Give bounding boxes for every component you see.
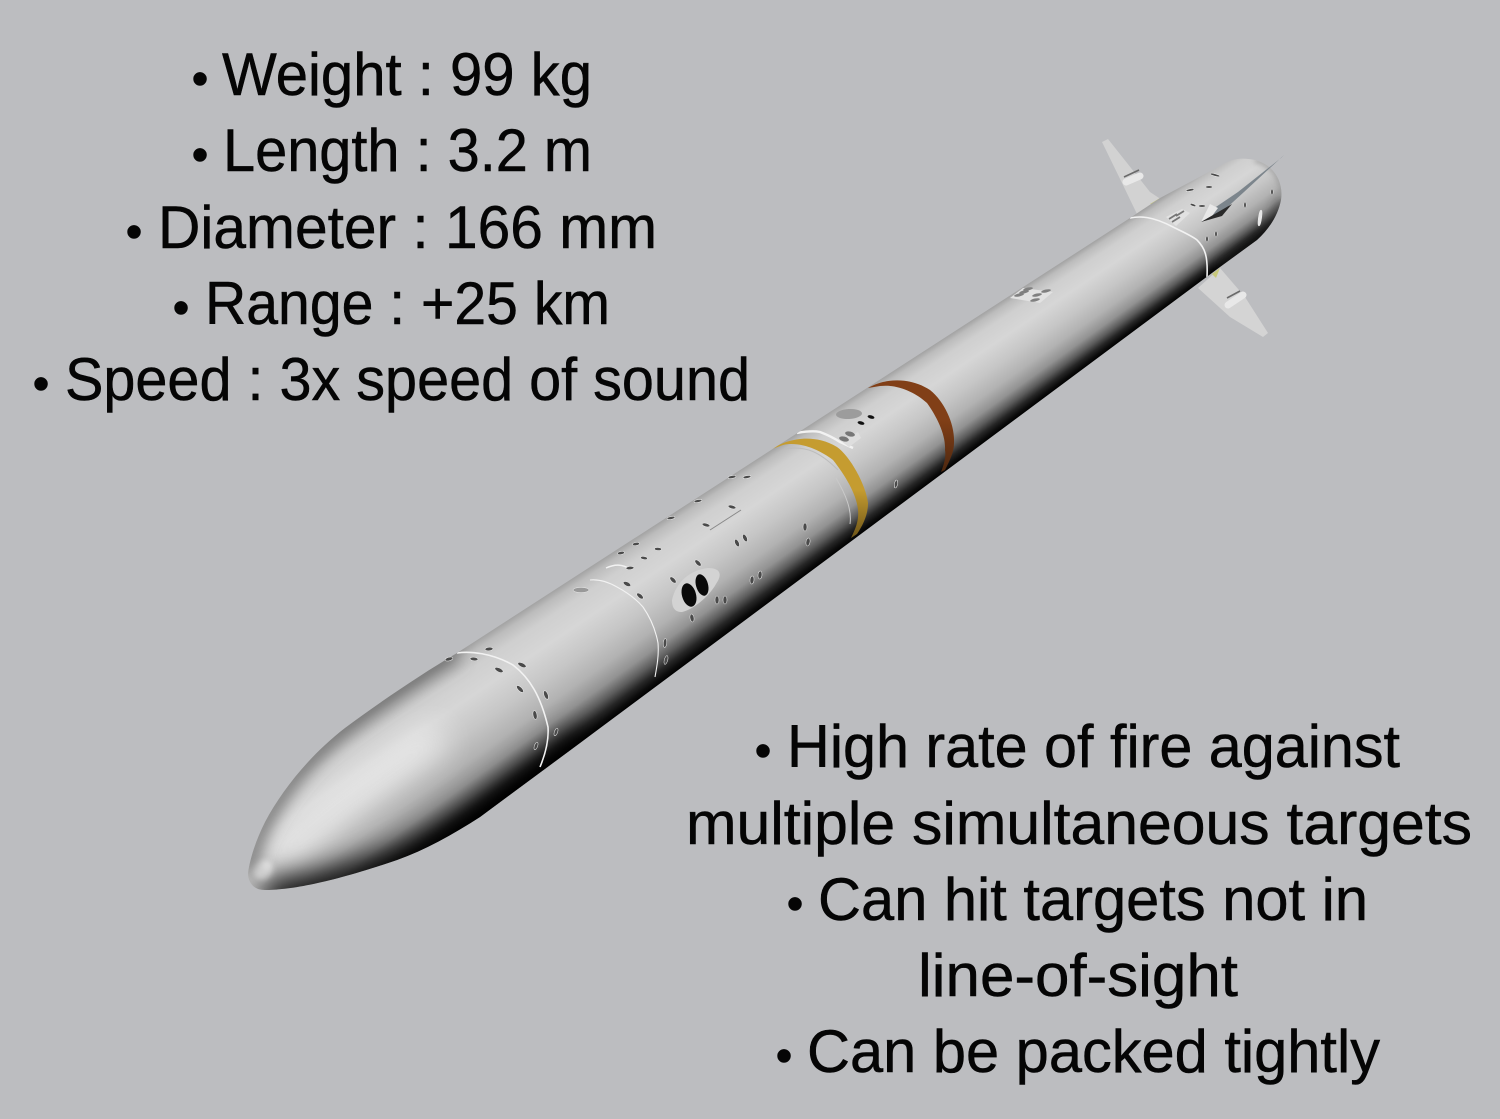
- round sensor plate: [672, 568, 720, 612]
- specifications list: •: [192, 53, 208, 106]
- capabilities list: Can be packed tightly: [807, 1018, 1380, 1085]
- capabilities list: •: [755, 725, 771, 778]
- specifications list: [33, 41, 750, 413]
- nose shading: [248, 160, 1281, 896]
- capabilities list: •: [787, 878, 803, 931]
- panel seams: [457, 217, 1207, 767]
- capabilities list: multiple simultaneous targets: [686, 790, 1472, 857]
- capabilities list: [686, 713, 1472, 1085]
- forward fin blade: [1201, 155, 1284, 222]
- specifications list: Range : +25 km: [205, 270, 610, 337]
- specifications list: Diameter : 166 mm: [158, 194, 657, 261]
- upper access plate: [710, 408, 875, 530]
- specifications list: •: [126, 206, 142, 259]
- specifications list: Length : 3.2 m: [223, 117, 592, 184]
- specifications list: •: [33, 358, 49, 411]
- specifications list: •: [173, 282, 189, 335]
- capabilities list: High rate of fire against: [787, 713, 1400, 780]
- specifications list: •: [192, 129, 208, 182]
- coloured rings: [772, 380, 954, 538]
- specifications list: Weight : 99 kg: [222, 41, 592, 108]
- vent panels: [1010, 209, 1190, 303]
- capabilities list: line-of-sight: [918, 942, 1238, 1009]
- missile illustration: [248, 139, 1284, 890]
- body details: [248, 156, 1284, 890]
- specifications list: Speed : 3x speed of sound: [65, 346, 750, 413]
- capabilities list: •: [776, 1030, 792, 1083]
- fasteners: [445, 173, 1273, 750]
- missile body: [248, 158, 1282, 886]
- capabilities list: Can hit targets not in: [818, 866, 1368, 933]
